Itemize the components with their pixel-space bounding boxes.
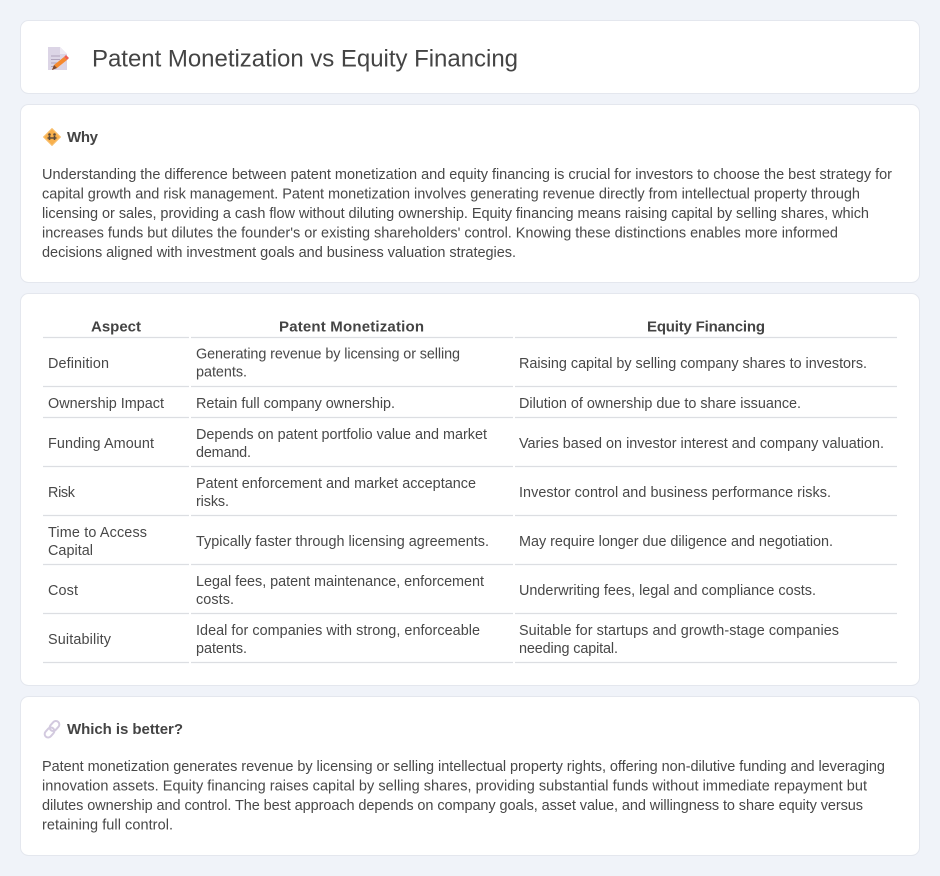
table row: time to access capital: [43, 525, 897, 564]
table row: time to access capital: May require longer due diligence and negotiation.: [519, 534, 833, 550]
text block: why explanation: capital growth and risk management. Patent monetization involves generating revenue directly from intellectual property through: [42, 186, 860, 202]
panel: title header: [20, 20, 920, 94]
table row: cost: costs.: [196, 592, 234, 608]
panel: comparison table: [20, 294, 920, 686]
table header row: Equity Financing: [647, 318, 765, 336]
heading: why: Why: [67, 129, 99, 146]
panel: why: [20, 104, 920, 282]
table row: suitability: Ideal for companies with strong, enforceable: [196, 623, 480, 639]
table row: suitability: Suitable for startups and growth-stage companies: [519, 623, 839, 639]
table row: definition: patents.: [196, 364, 247, 380]
table row: ownership impact: Dilution of ownership due to share issuance.: [519, 396, 801, 412]
table row: funding amount: [43, 427, 897, 466]
text block: why explanation: [42, 167, 892, 261]
table row: ownership impact: [43, 396, 897, 418]
table header row: Patent Monetization: [279, 318, 424, 336]
icon: diamond road sign: [44, 128, 60, 146]
table row: funding amount: Varies based on investor interest and company valuation.: [519, 436, 884, 452]
table row: risk: Risk: [48, 485, 76, 501]
table header row: [43, 318, 897, 338]
panel: which is better: [20, 696, 920, 856]
table row: ownership impact: Retain full company ownership.: [196, 396, 395, 412]
table row: cost: Underwriting fees, legal and compliance costs.: [519, 583, 816, 599]
table row: funding amount: Depends on patent portfolio value and market: [196, 427, 487, 443]
table row: definition: Raising capital by selling company shares to investors.: [519, 356, 867, 372]
table row: risk: Investor control and business performance risks.: [519, 485, 831, 501]
text block: verdict: [42, 759, 885, 834]
table row: cost: [43, 574, 897, 614]
title: Patent Monetization vs Equity Financing: [92, 46, 518, 72]
table row: risk: Patent enforcement and market acceptance: [196, 476, 476, 492]
table row: funding amount: demand.: [196, 445, 251, 461]
text block: why explanation: Understanding the difference between patent monetization and equity financing is crucial for investors to choose the best strategy for: [42, 167, 892, 183]
table row: suitability: patents.: [196, 641, 247, 657]
text block: verdict: innovation assets. Equity financing raises capital by selling shares, providing substantial funds without immediate repayment but: [42, 778, 867, 794]
table row: risk: risks.: [196, 494, 229, 510]
text block: verdict: retaining full control.: [42, 818, 173, 834]
table row: suitability: Suitability: [48, 632, 112, 648]
table row: suitability: [43, 623, 897, 662]
text block: why explanation: licensing or sales, providing a cash flow without diluting ownership. Equity financing means raising capital by selling shares, which: [42, 206, 869, 222]
table row: definition: Definition: [48, 356, 109, 372]
table row: time to access capital: Typically faster through licensing agreements.: [196, 534, 489, 550]
text block: why explanation: decisions aligned with investment goals and business valuation strategies.: [42, 245, 516, 261]
table row: suitability: needing capital.: [519, 641, 618, 657]
text block: verdict: dilutes ownership and control. The best approach depends on company goals, asset value, and willingness to share equity versus: [42, 798, 863, 814]
table row: funding amount: Funding Amount: [48, 436, 154, 452]
heading: which is better: Which is better?: [67, 721, 183, 738]
table row: time to access capital: Capital: [48, 543, 93, 559]
table row: cost: Cost: [48, 583, 78, 599]
table row: definition: Generating revenue by licensing or selling: [196, 346, 460, 362]
table row: ownership impact: Ownership Impact: [48, 396, 164, 412]
table header row: Aspect: [91, 318, 141, 336]
text block: verdict: Patent monetization generates revenue by licensing or selling intellectual property rights, offering non-dilutive funding and leveraging: [42, 759, 885, 775]
table row: cost: Legal fees, patent maintenance, enforcement: [196, 574, 484, 590]
icon: document with pencil: [48, 47, 69, 70]
table row: definition: [43, 346, 897, 386]
table row: time to access capital: Time to Access: [48, 525, 147, 541]
table row: risk: [43, 476, 897, 516]
text block: why explanation: increases funds but dilutes the founder's or existing shareholders' control. Knowing these distinctions enables more informed: [42, 226, 838, 242]
icon: chain link: [43, 720, 61, 739]
